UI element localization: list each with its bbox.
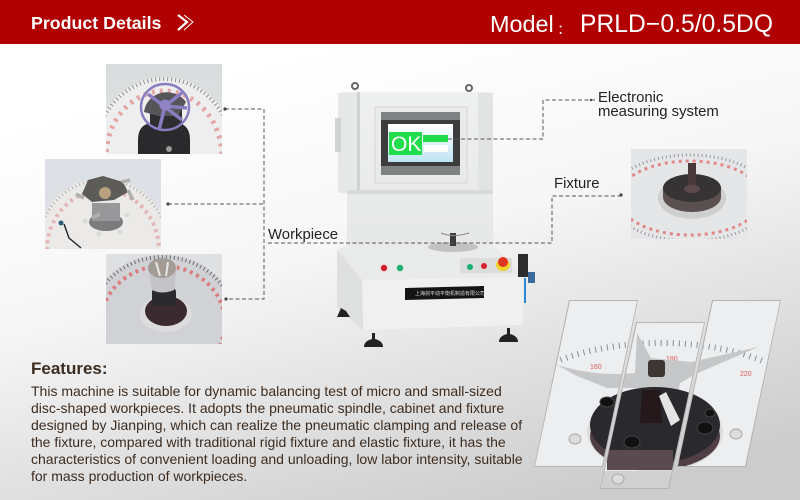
dial scale: 160 [590, 364, 602, 371]
machine [335, 83, 535, 347]
lower base [337, 233, 535, 330]
OK indicator: OK [391, 133, 421, 156]
label: electronic measuring system: Electronic [598, 90, 664, 106]
label: electronic measuring system: measuring system [598, 104, 719, 120]
label: fixture: Fixture [554, 176, 600, 192]
heading: model: ： [557, 22, 570, 37]
features text: This machine is suitable for dynamic balancing test of micro and small-sized [31, 383, 502, 399]
dial scale [555, 343, 765, 378]
features text: the fixture, compared with traditional rigid fixture and elastic fixture, it has the [31, 434, 506, 450]
spindle disc [428, 242, 478, 252]
header band [0, 0, 800, 44]
dial scale: 220 [740, 371, 752, 378]
close-up scene [530, 298, 785, 493]
feet [337, 308, 518, 347]
screws [569, 429, 742, 484]
triptych photo: fixture close-up [530, 298, 785, 493]
panel shadows [534, 300, 781, 489]
heading: Product Details: Product Details [31, 13, 162, 33]
nameplate [405, 286, 485, 300]
features text: disc-shaped workpieces. It adopts the pneumatic spindle, cabinet and fixture [31, 400, 504, 416]
callout lines [168, 100, 620, 299]
bolts [600, 397, 715, 448]
features text: designed by Jianping, which can realize the pneumatic clamping and release of [31, 417, 522, 433]
touch screen [375, 107, 467, 183]
photo: fixture [631, 149, 747, 239]
dial scale: 180 [666, 356, 678, 363]
fixture disc [587, 419, 723, 471]
callout dots [166, 99, 623, 301]
photo: workpiece 3 [106, 254, 222, 344]
photo: workpiece 2 [45, 159, 161, 249]
eye bolts [352, 83, 472, 91]
features heading: Features: [31, 359, 108, 378]
side valve [518, 254, 528, 277]
blade [558, 333, 758, 390]
heading: model [490, 11, 773, 38]
upper cabinet [335, 92, 493, 247]
features text: for mass production of workpieces. [31, 468, 247, 484]
photo: workpiece 1 [106, 64, 222, 154]
features text: characteristics of convenient loading and unloading, low labor intensity, suitable [31, 451, 523, 467]
icon: double chevron [178, 15, 193, 30]
label: workpiece: Workpiece [268, 227, 338, 243]
nameplate: 上海剑平动平衡机制造有限公司 [415, 290, 485, 297]
buttons [381, 265, 387, 271]
heading: model: PRLD−0.5/0.5DQ [580, 11, 773, 38]
emergency stop [496, 259, 510, 271]
heading: model: Model [490, 11, 554, 37]
